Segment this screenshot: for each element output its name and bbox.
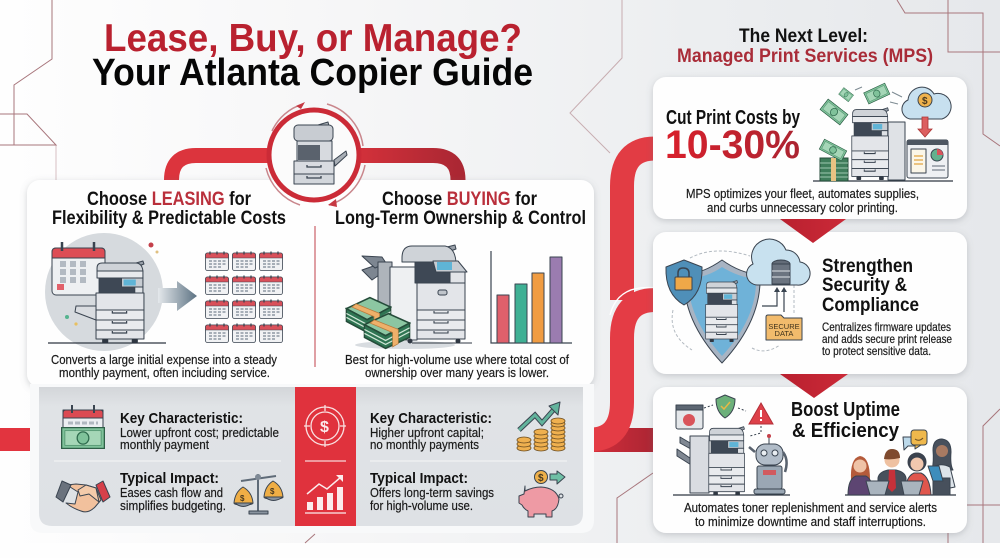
heading: strengthen security: Compliance (822, 294, 919, 316)
icon: copier, cash, cloud and dashboard: $ (922, 96, 928, 107)
text: security description: Centralizes firmware updates (822, 320, 951, 334)
text: leasing description: Converts a large initial expense into a steady (51, 352, 277, 367)
text: uptime description: to minimize downtime and staff interruptions. (695, 514, 926, 529)
icon: target dollar: $ (320, 419, 329, 436)
text: buying typical impact: Offers long-term savings (370, 485, 494, 500)
text: leasing key characteristic: Lower upfront cost; predictable (120, 425, 279, 440)
text: leasing typical impact: Typical Impact: (120, 470, 219, 487)
text: buying key characteristic: Key Characteristic: (370, 410, 492, 427)
panel: lower characteristics frame (30, 384, 594, 533)
icon: security shields, cloud, data: SECURE (768, 322, 800, 331)
text: leasing typical impact: Eases cash flow and (120, 485, 223, 500)
heading: boost uptime: & Efficiency (792, 419, 900, 442)
heading: boost uptime: Boost Uptime (791, 398, 900, 421)
connector: circle to buying panel arm (345, 156, 458, 182)
title: managed print services: Managed Print Services (MPS) (677, 46, 933, 67)
heading: boost uptime (791, 398, 900, 442)
arrow: security to uptime (780, 374, 848, 398)
text: cost description: MPS optimizes your fleet, automates supplies, (686, 186, 919, 201)
icon: piggy bank with coin (519, 470, 565, 517)
panel: boost uptime (653, 387, 967, 533)
title: Lease, Buy, or Manage? (104, 17, 522, 60)
arrow: leasing conversion (158, 281, 197, 311)
heading: buying subtitle: Long-Term Ownership & Control (335, 208, 586, 229)
title: Your Atlanta Copier Guide (92, 52, 533, 94)
text: buying description (345, 352, 569, 380)
heading: strengthen security: Strengthen (822, 255, 913, 277)
text: leasing description: monthly payment, often inciuding service. (59, 365, 270, 380)
icon: coin stacks with rising arrow (517, 402, 565, 451)
icon: target dollar (304, 405, 346, 447)
connector: pipe to security panel (583, 300, 655, 440)
text: leasing typical impact (120, 470, 226, 513)
icon: security shields, cloud, data (666, 239, 810, 363)
icon: calendar and copier leasing (45, 233, 166, 351)
text: cost description (686, 186, 919, 215)
text: buying typical impact: for high-volume use. (370, 498, 473, 513)
icon: balance scales (234, 474, 283, 514)
heading: leasing: Choose LEASING for (87, 189, 252, 210)
text: security description: and adds secure print release (822, 332, 952, 346)
text: buying key characteristic (370, 410, 492, 452)
text: leasing key characteristic: Key Characteristic: (120, 410, 243, 427)
text: buying description: ownership over many years is lower. (365, 365, 549, 380)
text: leasing key characteristic (120, 410, 279, 452)
panel: cut print costs (653, 77, 967, 219)
icon: piggy bank with coin: $ (538, 473, 544, 484)
connector: pipe to cost panel (622, 148, 655, 300)
panel: strengthen security (653, 232, 967, 374)
title: managed print services (677, 26, 933, 67)
heading: strengthen security: Security & (822, 274, 907, 296)
text: leasing description (51, 352, 277, 380)
icon: staff team (845, 430, 956, 495)
heading: strengthen security (822, 255, 919, 316)
icon: calendar with cash (62, 405, 104, 448)
heading: buying: Choose BUYING for (382, 189, 538, 210)
connector: dark bar to boost panel (583, 428, 655, 452)
text: buying typical impact (370, 470, 494, 513)
text: buying description: Best for high-volume use where total cost of (345, 352, 569, 367)
connector: circle to leasing panel arm (172, 156, 280, 182)
text: leasing key characteristic: monthly payment (120, 437, 209, 452)
icon: security shields, cloud, data: DATA (775, 329, 793, 338)
connector: left red bar (0, 428, 40, 451)
text: leasing typical impact: simplifies budgeting. (120, 498, 226, 513)
text: security description (822, 320, 952, 358)
title (92, 17, 533, 94)
text: cost description: and curbs unnecessary color printing. (707, 200, 898, 215)
panel: leasing and buying comparison (27, 180, 594, 387)
statistic: 10-30%: 10-30% (665, 123, 800, 167)
icon: buying copier with cash (346, 245, 472, 349)
text: uptime description: Automates toner replenishment and service alerts (684, 500, 937, 515)
icon: copier, robot and alerts (673, 395, 790, 495)
icon: rising bar chart (305, 475, 346, 513)
heading: cut print costs: Cut Print Costs by (666, 107, 801, 129)
icon: balance scales: $ (270, 487, 275, 496)
text: buying typical impact: Typical Impact: (370, 470, 468, 487)
icon: balance scales: $ (240, 494, 245, 503)
bar chart: long-term value (491, 251, 572, 343)
text: uptime description (684, 500, 937, 529)
text: security description: to protect sensitive data. (822, 344, 931, 358)
heading: leasing subtitle: Flexibility & Predictable Costs (52, 208, 286, 229)
icon: copier, cash, cloud and dashboard (813, 83, 953, 181)
icon: handshake (56, 481, 110, 512)
title: managed print services: The Next Level: (739, 26, 868, 47)
text: buying key characteristic: Higher upfront capital; (370, 425, 484, 440)
icon: grid of monthly calendars (206, 252, 282, 342)
text: buying key characteristic: no monthly payments (370, 437, 479, 452)
arrow: cost to security (780, 219, 846, 243)
icon: central copier in red ring (266, 102, 365, 207)
